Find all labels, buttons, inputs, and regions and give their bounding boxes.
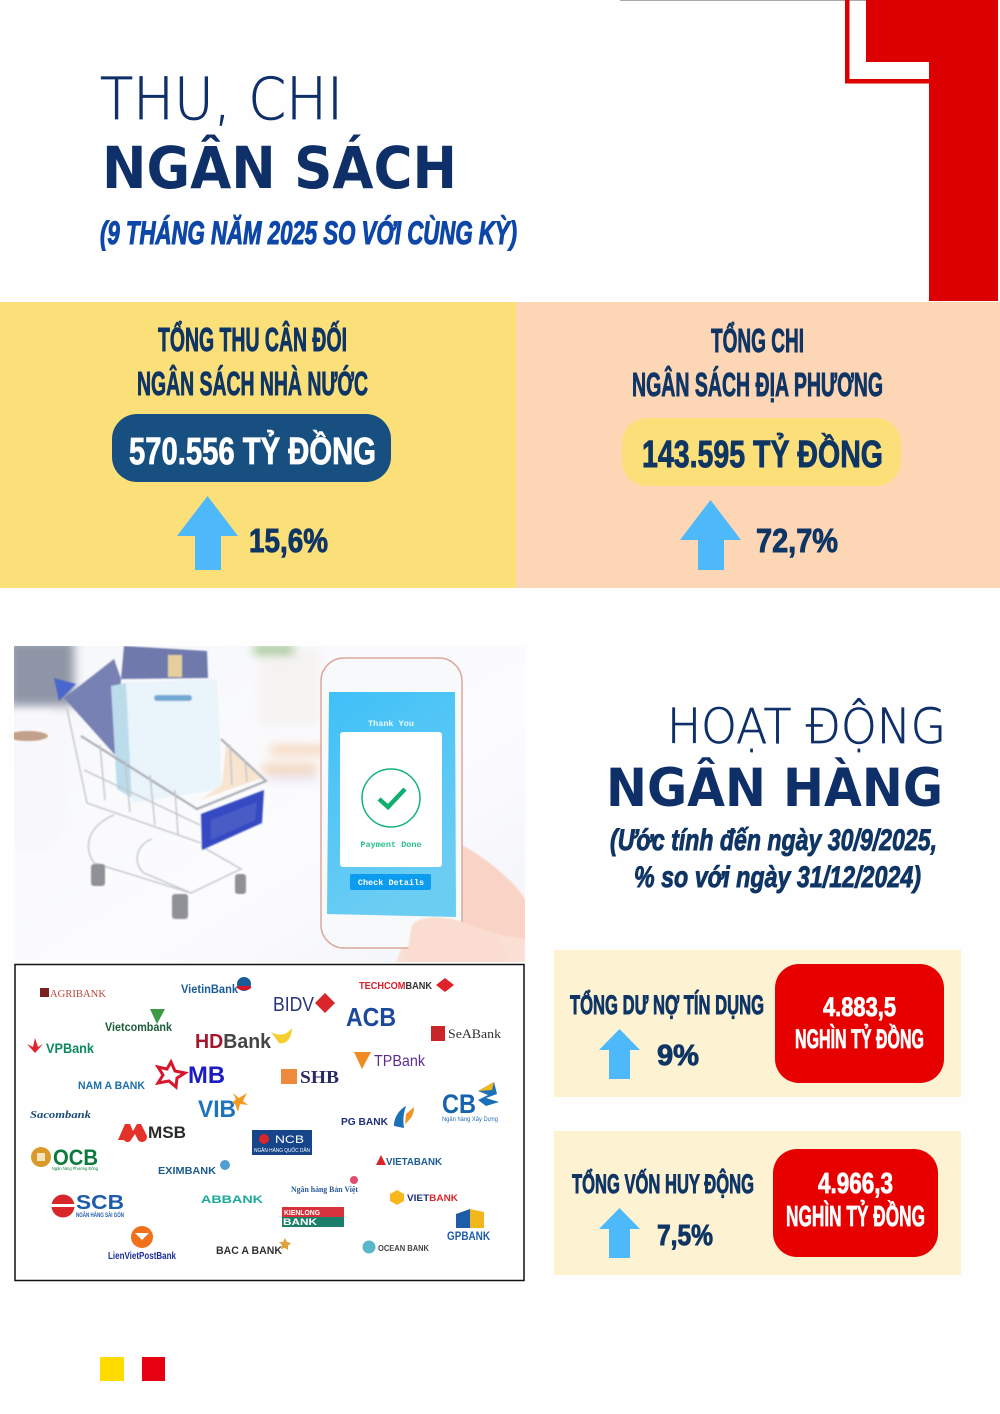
panel: total local budget spending — [516, 302, 1000, 588]
logo: PG Bank — [341, 1106, 414, 1128]
logo: SeABank: SeABank — [448, 1027, 502, 1041]
revenue amount pill: 570.556 TỶ ĐỒNG — [129, 429, 376, 473]
footer squares — [100, 1357, 165, 1381]
logo: NCB — [252, 1130, 312, 1155]
thank you label: Thank You — [368, 719, 414, 729]
panel: total budget revenue — [0, 302, 516, 588]
logo: Agribank: AGRIBANK — [50, 989, 107, 1000]
icon: up arrow — [177, 496, 238, 570]
logo: SeABank — [431, 1026, 502, 1041]
logo: NCB: NCB — [275, 1134, 304, 1146]
icon: up arrow — [599, 1208, 640, 1258]
title line 1: THU, CHI — [100, 65, 343, 133]
capital amount box — [773, 1149, 938, 1257]
revenue amount pill — [112, 414, 391, 482]
heading: hoạt động ngân hàng — [606, 698, 946, 894]
revenue heading — [137, 320, 368, 402]
spending growth value: 72,7% — [756, 522, 838, 559]
logo: VietinBank — [181, 977, 251, 996]
logo: Eximbank — [158, 1160, 230, 1177]
logo: Sacombank: Sacombank — [30, 1109, 92, 1121]
cart wheels — [91, 864, 246, 919]
logo: VietinBank: VietinBank — [181, 982, 238, 996]
logo: Ocean Bank — [362, 1240, 429, 1254]
logo: SCB: NGÂN HÀNG SÀI GÒN — [76, 1211, 124, 1219]
cart contents — [54, 646, 262, 803]
logo: NCB: NGÂN HÀNG QUỐC DÂN — [254, 1147, 310, 1154]
logo: Techcombank — [359, 978, 454, 992]
logo: OCB — [31, 1145, 98, 1171]
logo: Techcombank: TECHCOMBANK — [359, 981, 433, 992]
hand behind phone — [395, 845, 530, 965]
logo: ABBank: ABBANK — [201, 1194, 263, 1206]
revenue heading: TỔNG THU CÂN ĐỐI — [158, 320, 347, 358]
title: thu, chi ngân sách — [100, 65, 517, 251]
logo: LienVietPostBank: LienVietPostBank — [108, 1251, 176, 1262]
logo: SHB — [281, 1067, 339, 1087]
credit label: TỔNG DƯ NỢ TÍN DỤNG — [570, 989, 764, 1020]
logo: Bac A Bank: BAC A BANK — [216, 1245, 282, 1257]
spending heading: TỔNG CHI — [711, 322, 804, 359]
logo: VPBank: VPBank — [46, 1040, 94, 1056]
thumb — [407, 916, 466, 949]
capital growth value: 7,5% — [657, 1220, 713, 1252]
cart frame — [67, 709, 266, 893]
logo: Kienlong Bank: KIENLONG — [284, 1210, 321, 1217]
revenue growth value: 15,6% — [249, 522, 328, 559]
panel: bank logos — [15, 964, 524, 1280]
logo: OCB: Ngân hàng Phương Đông — [52, 1166, 98, 1171]
logo: SCB: SCB — [76, 1192, 124, 1214]
logo: Kienlong Bank: BANK — [283, 1217, 317, 1228]
blurred background objects — [8, 640, 330, 782]
logo: Nam A Bank: NAM A BANK — [78, 1080, 145, 1092]
logo: TPBank: TPBank — [374, 1053, 426, 1070]
logo: MSB: MSB — [148, 1123, 186, 1142]
logo: SCB — [51, 1192, 124, 1219]
logo: MB — [158, 1062, 225, 1089]
check details button: Check Details — [358, 878, 424, 888]
logo: VIB: VIB — [198, 1096, 236, 1123]
logo: CB — [442, 1082, 499, 1123]
credit growth value: 9% — [657, 1040, 699, 1072]
logo: GPBank — [447, 1209, 490, 1243]
subtitle: (9 THÁNG NĂM 2025 SO VỚI CÙNG KỲ) — [100, 215, 517, 251]
spending amount pill: 143.595 TỶ ĐỒNG — [642, 432, 883, 476]
icon: up arrow — [599, 1029, 640, 1079]
panel: total credit — [554, 950, 961, 1097]
logo: VPBank — [27, 1038, 94, 1056]
spending amount pill — [622, 418, 901, 486]
logo: TPBank — [354, 1052, 426, 1070]
heading note — [610, 824, 937, 894]
spending heading — [632, 322, 883, 403]
logo: CB: Ngân hàng Xây Dựng — [442, 1116, 498, 1123]
logo: VietABank: VIETABANK — [386, 1157, 443, 1168]
logo: CB: CB — [442, 1089, 476, 1119]
credit amount box: 4.883,5 — [823, 992, 896, 1022]
payment done label: Payment Done — [360, 840, 422, 850]
logo: OCB: OCB — [53, 1145, 98, 1170]
logo: Eximbank: EXIMBANK — [158, 1166, 217, 1177]
logo: HDBank — [195, 1028, 292, 1053]
logo: BIDV: BIDV — [273, 994, 315, 1016]
logo: LienVietPostBank — [108, 1226, 176, 1262]
capital label: TỔNG VỐN HUY ĐỘNG — [572, 1167, 754, 1199]
logo: Vietbank: VIETBANK — [407, 1193, 459, 1203]
logo: GPBank: GPBANK — [447, 1229, 490, 1243]
heading line 2: NGÂN HÀNG — [606, 756, 943, 819]
heading line 1: HOẠT ĐỘNG — [667, 698, 946, 755]
logo: Ngân hàng Bản Việt — [291, 1176, 358, 1194]
logo: ACB: ACB — [346, 1002, 396, 1032]
check details button — [350, 874, 431, 890]
cart blue tag — [201, 790, 264, 850]
icon: check circle — [362, 769, 420, 827]
payment card — [340, 732, 442, 867]
panel: total capital mobilised — [554, 1131, 961, 1275]
logo: Vietbank — [390, 1190, 459, 1205]
logo: SHB: SHB — [300, 1067, 339, 1087]
logo: Vietcombank — [105, 1009, 172, 1034]
logo: Bac A Bank — [216, 1238, 291, 1257]
revenue heading: NGÂN SÁCH NHÀ NƯỚC — [137, 365, 368, 402]
logo: MB: MB — [188, 1062, 225, 1089]
logo: Vietcombank: Vietcombank — [105, 1020, 172, 1034]
phone screen — [327, 692, 456, 917]
title line 2: NGÂN SÁCH — [102, 133, 457, 202]
phone — [321, 658, 462, 948]
credit amount box — [775, 964, 944, 1083]
capital amount box: 4.966,3 — [818, 1168, 893, 1200]
decorative red corner shape — [620, 0, 998, 301]
logo: Ngân hàng Bản Việt: Ngân hàng Bản Việt — [291, 1185, 358, 1194]
icon: up arrow — [680, 500, 741, 570]
heading note: % so với ngày 31/12/2024) — [634, 861, 921, 894]
mug — [14, 730, 49, 742]
photo: shopping cart and phone payment — [8, 640, 530, 965]
logo: Kienlong Bank — [282, 1207, 344, 1228]
logo: Ocean Bank: OCEAN BANK — [378, 1244, 429, 1253]
logo: HDBank: HDBank — [195, 1031, 272, 1053]
logo: PG Bank: PG BANK — [341, 1117, 389, 1128]
logo: MSB — [118, 1123, 186, 1142]
